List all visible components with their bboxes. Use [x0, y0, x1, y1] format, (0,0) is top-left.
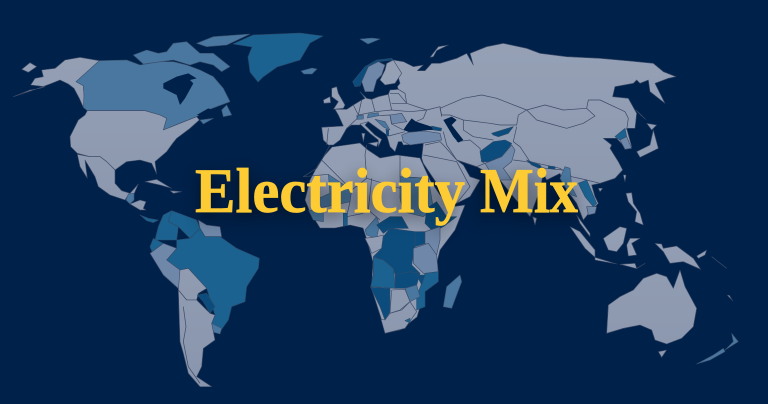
Namibia — [371, 287, 390, 320]
Guianas — [198, 220, 222, 237]
Cuba — [145, 179, 172, 188]
Sakhalin — [636, 110, 646, 119]
Malay peninsula — [577, 215, 590, 237]
Uruguay — [212, 323, 222, 334]
Ecuador — [150, 238, 163, 255]
Japan: Honshu — [637, 130, 658, 157]
New Guinea — [655, 243, 701, 269]
Ireland — [323, 97, 331, 103]
Caspian Sea — [443, 117, 463, 143]
Greenland — [233, 33, 323, 82]
South Korea — [620, 137, 632, 149]
Mongolia and China border — [527, 100, 628, 130]
New Caledonia — [727, 295, 733, 301]
Canada — [76, 60, 230, 130]
Hainan — [598, 188, 603, 192]
Lesser Sunda islands — [620, 263, 645, 269]
Paraguay — [197, 293, 215, 313]
map: South Asian countries — [480, 127, 632, 215]
Poland east border — [375, 94, 392, 112]
Newfoundland — [222, 105, 232, 117]
Russia south border — [407, 103, 442, 117]
Afghanistan — [480, 140, 512, 162]
Madagascar — [443, 275, 462, 308]
Mozambique — [417, 272, 438, 310]
Novaya Zemlya — [430, 45, 448, 57]
Ghana — [343, 213, 347, 226]
map: Africa landmass — [305, 143, 465, 333]
Myanmar — [560, 167, 577, 197]
Germany and Poland borders — [358, 99, 375, 115]
North Korea — [615, 128, 627, 140]
Lesotho — [405, 318, 410, 323]
Tasmania — [658, 350, 667, 357]
Seward peninsula — [22, 63, 37, 72]
Gulf of St Lawrence — [197, 108, 217, 118]
Solomon islands — [712, 257, 727, 268]
Arabia borders — [423, 155, 470, 203]
Angola — [371, 257, 395, 288]
title shadow: Electricity Mix — [196, 161, 578, 232]
Mali — [315, 174, 352, 208]
Italy — [360, 122, 382, 147]
Nova Scotia — [200, 118, 213, 124]
map: Europe countries — [323, 58, 463, 147]
Java — [595, 257, 617, 264]
Guatemala — [126, 193, 134, 204]
Tanzania — [413, 243, 438, 273]
Algeria and Libya borders — [322, 145, 367, 190]
Pakistan — [485, 145, 515, 180]
Zambia — [395, 272, 420, 288]
Senegal and Guinea — [308, 210, 323, 222]
Chad south border — [368, 178, 380, 220]
Chile border — [183, 307, 200, 383]
Brazil — [167, 228, 259, 332]
Great Britain — [332, 87, 345, 109]
Ellesmere island — [197, 34, 250, 47]
Cambodia — [587, 207, 597, 215]
map: Southeast Asia and Oceania — [533, 175, 738, 364]
Balkan borders — [378, 115, 403, 130]
Greece border — [389, 132, 405, 136]
New Britain — [697, 250, 707, 258]
Belarus borders — [390, 93, 407, 103]
Eurasia landmass — [322, 43, 676, 220]
Nepal — [527, 160, 543, 170]
Argentina and Chile — [178, 290, 215, 387]
Ethiopia — [425, 202, 457, 232]
Gabon and Congo — [365, 235, 383, 253]
Hispaniola — [170, 191, 182, 193]
Sudan — [400, 177, 433, 217]
Libya and Egypt borders — [400, 155, 428, 178]
Costa Rica and Panama — [140, 215, 158, 223]
Georgia — [432, 126, 442, 131]
Tajikistan and Kyrgyzstan — [492, 127, 513, 137]
New Zealand north — [725, 333, 738, 350]
Philippines — [626, 193, 643, 225]
title: Mix — [480, 155, 578, 226]
title: Electricity — [195, 155, 465, 226]
Ukraine borders — [392, 110, 427, 122]
Black Sea — [403, 118, 442, 132]
Iran border — [443, 132, 485, 167]
Sicily — [368, 142, 378, 147]
Central America — [130, 200, 146, 210]
Bolivia — [178, 268, 207, 300]
Alaska — [13, 57, 99, 107]
Borneo — [603, 227, 627, 252]
Sulawesi — [627, 238, 640, 256]
Svalbard — [360, 38, 380, 44]
Maghreb borders — [303, 160, 328, 177]
Japan: Hokkaido — [647, 123, 657, 130]
Mongolia north border — [527, 105, 587, 110]
Sri Lanka — [533, 217, 537, 225]
Sweden — [362, 62, 385, 92]
Colombia — [155, 211, 178, 240]
Bhutan — [548, 166, 555, 169]
map: North African countries — [303, 145, 433, 220]
Laos — [578, 180, 597, 207]
Turkey — [402, 131, 442, 145]
Croatia and Bosnia — [375, 119, 390, 130]
Kenya — [425, 227, 440, 255]
Iberia border — [327, 128, 328, 145]
Malawi — [417, 275, 425, 285]
Nigeria border — [347, 202, 363, 217]
Taiwan — [623, 175, 626, 182]
Peru — [150, 243, 180, 290]
Hudson Bay — [163, 73, 197, 105]
DR Congo — [373, 228, 420, 275]
Central African Republic — [377, 217, 408, 233]
map: Eurasia landmass and Asian borders — [322, 43, 676, 220]
South Sudan — [415, 232, 426, 247]
Middle East borders — [425, 142, 457, 160]
Romania — [390, 113, 407, 124]
Cameroon — [365, 217, 379, 238]
China west border — [513, 127, 600, 183]
Sumatra — [570, 227, 595, 257]
map: Greenland and Iceland — [233, 33, 380, 82]
Norway — [353, 58, 393, 87]
map: South America and southern Africa — [140, 202, 462, 387]
Baltic borders — [398, 89, 407, 103]
Austria — [367, 113, 378, 118]
Switzerland — [357, 115, 363, 119]
Arctic islands — [133, 42, 230, 72]
South Africa — [381, 302, 417, 333]
Central Asia borders — [463, 120, 493, 140]
USA — [70, 111, 199, 174]
Sardinia — [362, 133, 365, 142]
map: North America — [13, 34, 250, 210]
Zimbabwe — [405, 285, 420, 302]
Kazakhstan border — [440, 95, 527, 125]
Mexico — [77, 154, 138, 200]
Western Europe borders — [347, 105, 358, 128]
Iceland — [301, 68, 317, 74]
India border — [513, 160, 563, 170]
New Zealand south — [697, 348, 725, 364]
Finland — [380, 60, 402, 85]
Botswana — [390, 289, 410, 313]
Venezuela — [168, 211, 200, 238]
Australia — [607, 270, 697, 344]
Chad and Niger borders — [367, 178, 400, 188]
Albania — [386, 129, 389, 136]
